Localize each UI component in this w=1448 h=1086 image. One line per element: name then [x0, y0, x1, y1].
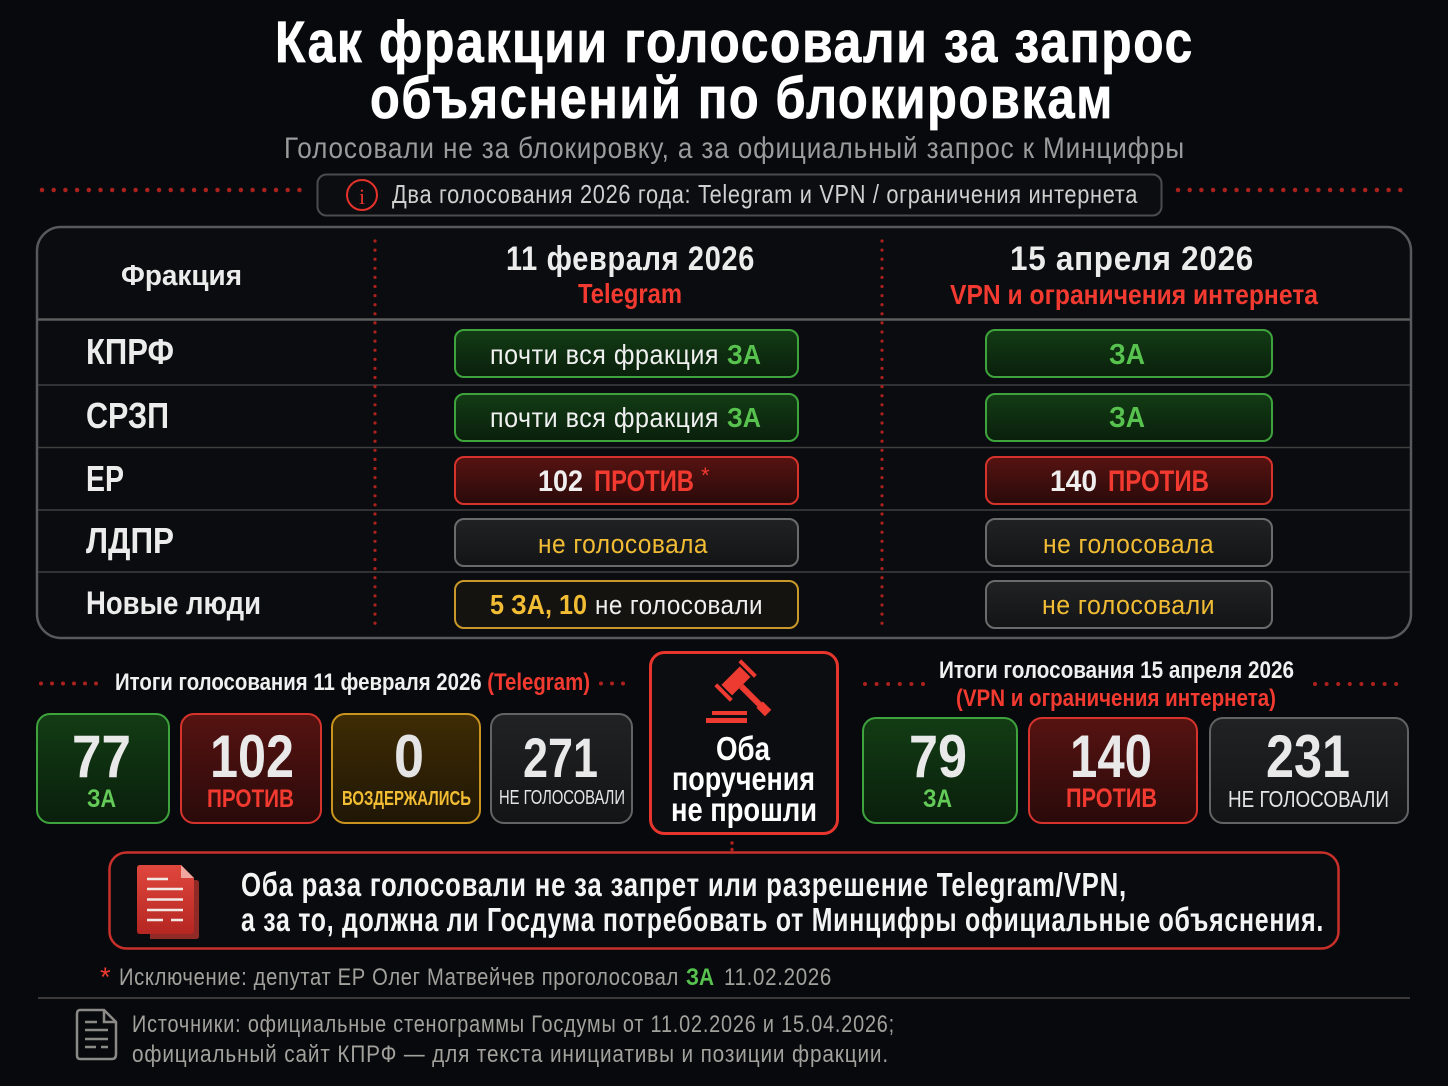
card: 77 за: 77 [72, 723, 131, 790]
footnote: Исключение: депутат ЕР Олег Матвейчев проголосовал [119, 964, 679, 991]
title: объяснений по блокировкам [370, 66, 1114, 131]
heading: April results: (VPN и ограничения интернета) [956, 685, 1276, 712]
row: ЕР cells: ПРОТИВ [594, 465, 694, 498]
card: 0 воздержались: 0 [394, 723, 424, 790]
callout: key conclusion [110, 852, 1338, 948]
card: 271 не голосовали [491, 714, 632, 823]
subtitle: Голосовали не за блокировку, а за официальный запрос к Минцифры [284, 132, 1185, 165]
row: КПРФ cells: ЗА [1109, 339, 1145, 371]
icon: sources document [77, 1010, 116, 1059]
callout: key conclusion: Оба раза голосовали не за запрет или разрешение Telegram/VPN, [241, 866, 1127, 903]
footnote: ЗА [686, 964, 714, 991]
info banner [42, 174, 1408, 216]
card: 102 против: 102 [210, 723, 294, 790]
card: 77 за: ЗА [87, 785, 116, 813]
card: 77 за [37, 714, 169, 823]
faction names: КПРФ [86, 331, 174, 372]
card: 231 не голосовали: 231 [1266, 723, 1350, 790]
icon: info [347, 180, 377, 210]
heading: April results [865, 657, 1407, 712]
footnote: 11.02.2026 [724, 964, 832, 991]
row: СРЗП cells: почти вся фракция [490, 402, 719, 433]
card: 79 за: ЗА [923, 785, 952, 813]
sources text: Источники: официальные стенограммы Госдумы от 11.02.2026 и 15.04.2026; [132, 1011, 895, 1038]
row: ЕР cells: 140 [1050, 465, 1097, 498]
faction names: ЕР [86, 458, 124, 499]
card: 79 за: 79 [909, 723, 967, 790]
card: 102 против [181, 714, 321, 823]
panel: verdict [650, 652, 838, 834]
table header: Фракция [121, 260, 242, 292]
row: Новые люди cells [455, 581, 1272, 628]
row: ЛДПР cells: не голосовала [538, 529, 708, 559]
card: 79 за [863, 718, 1017, 823]
stat cards: February [37, 714, 632, 823]
title: Как фракции голосовали за запрос [275, 10, 1194, 75]
row: Новые люди cells: 5 ЗА, 10 [490, 589, 587, 620]
row: ЕР cells: ПРОТИВ [1108, 465, 1209, 498]
sources text [132, 1011, 895, 1068]
row: КПРФ cells: почти вся фракция [490, 339, 719, 370]
icon: red document [137, 865, 199, 939]
heading: February results: Итоги голосования 11 февраля 2026 (Telegram) [115, 669, 590, 696]
card: 102 против: ПРОТИВ [207, 785, 294, 813]
row: Новые люди cells: не голосовали [1042, 590, 1215, 620]
row: ЕР cells: 102 [538, 465, 583, 498]
faction names: ЛДПР [86, 520, 174, 561]
faction names: СРЗП [86, 395, 169, 436]
row: ЛДПР cells: не голосовала [1043, 529, 1214, 559]
row: ЕР cells [455, 457, 1272, 504]
title [275, 10, 1194, 131]
row: КПРФ cells: ЗА [727, 339, 761, 370]
panel: verdict: поручения [672, 760, 815, 797]
heading: April results: Итоги голосования 15 апреля 2026 [939, 657, 1294, 684]
stat cards: April [863, 718, 1408, 823]
faction names [86, 331, 261, 621]
panel: verdict: не прошли [671, 791, 817, 828]
info banner: Два голосования 2026 года: Telegram и VPN / ограничения интернета [392, 179, 1138, 209]
sources text: официальный сайт КПРФ — для текста инициативы и позиции фракции. [132, 1041, 889, 1068]
icon: gavel [706, 659, 782, 727]
card: 0 воздержались [332, 714, 480, 823]
row: ЕР cells: * [701, 463, 710, 488]
table header: 15 апреля 2026 [1010, 240, 1254, 278]
card: 140 против: 140 [1070, 723, 1152, 790]
row: КПРФ cells [455, 330, 1272, 377]
card: 140 против [1029, 718, 1197, 823]
table header: VPN и ограничения интернета [950, 279, 1318, 310]
card: 271 не голосовали: НЕ ГОЛОСОВАЛИ [499, 787, 625, 809]
card: 0 воздержались: ВОЗДЕРЖАЛИСЬ [342, 788, 471, 810]
row: ЛДПР cells [455, 519, 1272, 566]
row: СРЗП cells: ЗА [1109, 402, 1145, 434]
footnote: * [100, 962, 111, 992]
card: 140 против: ПРОТИВ [1066, 783, 1157, 813]
row: СРЗП cells: ЗА [727, 402, 761, 433]
table header [121, 240, 1318, 310]
table header: 11 февраля 2026 [506, 240, 755, 278]
card: 231 не голосовали: НЕ ГОЛОСОВАЛИ [1228, 786, 1389, 812]
icon: info: i [359, 184, 365, 209]
table header: Telegram [578, 278, 682, 309]
panel: verdict: Оба [716, 730, 771, 767]
card: 231 не голосовали [1210, 718, 1408, 823]
row: СРЗП cells [455, 394, 1272, 441]
faction names: Новые люди [86, 585, 261, 621]
card: 271 не голосовали: 271 [523, 726, 598, 789]
panel: voting table [37, 227, 1411, 638]
row: Новые люди cells: не голосовали [595, 590, 763, 620]
